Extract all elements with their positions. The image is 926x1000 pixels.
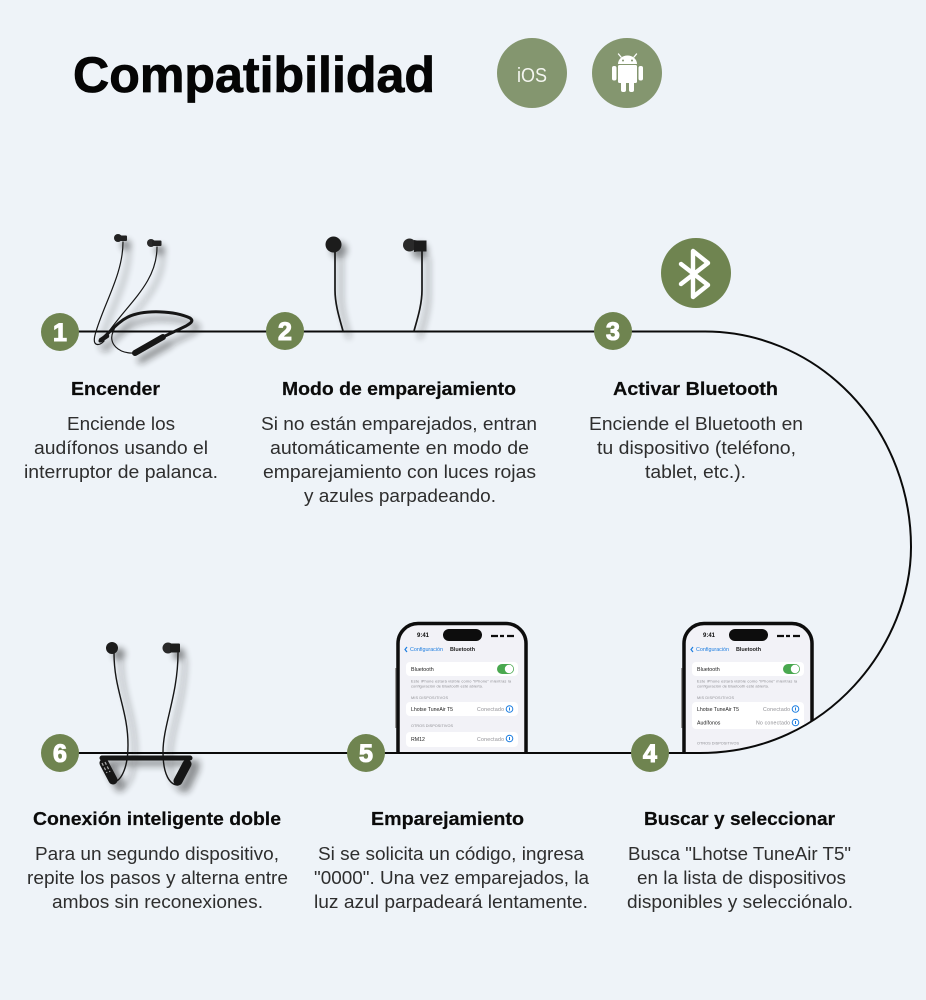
step 3 number badge: 3 [606, 318, 620, 346]
icon: Android badge [592, 38, 662, 108]
step 1 description [24, 413, 218, 482]
phone: step 4 Bluetooth screen: Bluetooth [697, 667, 720, 673]
step 2 description [261, 413, 537, 506]
icon: Bluetooth badge [661, 238, 731, 308]
step 5 description: "0000". Una vez emparejados, la [314, 867, 590, 888]
step 3 description: tu dispositivo (teléfono, [597, 437, 796, 458]
step 1 heading: Encender [71, 378, 160, 399]
step 3 number badge [594, 312, 632, 350]
phone: step 5 Bluetooth screen: configuración de Bluetooth esté abierta. [411, 684, 483, 688]
title: Compatibilidad [73, 47, 435, 103]
step 6 heading: Conexión inteligente doble [33, 808, 281, 829]
step 3 description: tablet, etc.). [645, 461, 746, 482]
phone: step 4 Bluetooth screen: MIS DISPOSITIVOS [697, 696, 734, 700]
phone: step 4 Bluetooth screen: Bluetooth [736, 647, 761, 653]
phone: step 4 Bluetooth screen: Este iPhone estará visible como "iPhone" mientras la [697, 678, 798, 684]
step 4 description: Busca "Lhotse TuneAir T5" [628, 843, 851, 864]
phone: step 5 Bluetooth screen: Configuración [410, 647, 443, 653]
step 6 number badge [41, 734, 79, 772]
step 3 description: Enciende el Bluetooth en [589, 413, 803, 434]
step 6 description [27, 843, 288, 912]
step 1 description: audífonos usando el [34, 437, 208, 458]
phone: step 5 Bluetooth screen: Bluetooth [411, 667, 434, 673]
phone: step 5 Bluetooth screen: Este iPhone estará visible como "iPhone" mientras la [411, 678, 512, 684]
phone: step 5 Bluetooth screen: MIS DISPOSITIVOS [411, 696, 448, 700]
phone: step 5 Bluetooth screen: Lhotse TuneAir T5 [411, 707, 453, 713]
step 4 description: disponibles y selecciónalo. [627, 891, 853, 912]
step 4 description [627, 843, 853, 912]
step 1 description: interruptor de palanca. [24, 461, 218, 482]
icon: earbuds step 2 [326, 236, 428, 337]
phone: step 5 Bluetooth screen: Conectado [477, 737, 504, 743]
phone: step 5 Bluetooth screen: Conectado [477, 707, 504, 713]
step 5 description: Si se solicita un código, ingresa [318, 843, 585, 864]
step 6 number badge: 6 [53, 740, 67, 768]
step 4 number badge: 4 [643, 740, 657, 768]
phone: step 5 Bluetooth screen: Bluetooth [450, 647, 475, 653]
phone: step 4 Bluetooth screen: configuración de Bluetooth esté abierta. [697, 684, 769, 688]
step 5 description: luz azul parpadeará lentamente. [314, 891, 588, 912]
phone: step 4 Bluetooth screen: Configuración [696, 647, 729, 653]
phone: step 4 Bluetooth screen: No conectado [756, 720, 790, 726]
step 5 heading: Emparejamiento [371, 808, 524, 829]
icon: neckband earphones step 6 [102, 642, 197, 791]
phone: step 4 Bluetooth screen: Audífonos [697, 720, 721, 726]
phone: step 4 Bluetooth screen: Lhotse TuneAir T5 [697, 707, 739, 713]
step 4 heading: Buscar y seleccionar [644, 808, 835, 829]
phone: step 5 Bluetooth screen: 9:41 [417, 633, 430, 639]
step 6 description: repite los pasos y alterna entre [27, 867, 288, 888]
step 1 number badge [41, 313, 79, 351]
step 1 description: Enciende los [67, 413, 175, 434]
phone: step 4 Bluetooth screen: 9:41 [703, 633, 716, 639]
step 6 description: Para un segundo dispositivo, [35, 843, 279, 864]
phone: step 4 Bluetooth screen: OTROS DISPOSITIVOS [697, 742, 739, 746]
step 2 description: y azules parpadeando. [304, 485, 496, 506]
step 4 description: en la lista de dispositivos [637, 867, 846, 888]
step 2 heading: Modo de emparejamiento [282, 378, 516, 399]
phone: step 5 Bluetooth screen [395, 622, 528, 752]
step 2 description: Si no están emparejados, entran [261, 413, 537, 434]
step 2 description: emparejamiento con luces rojas [263, 461, 536, 482]
icon: iOS badge: iOS [517, 65, 547, 87]
step 5 number badge [347, 734, 385, 772]
icon: neckband earphones step 1 [94, 234, 198, 360]
step 2 number badge [266, 312, 304, 350]
phone: step 5 Bluetooth screen: RM12 [411, 737, 425, 743]
step 1 number badge: 1 [53, 319, 67, 347]
icon: iOS badge [497, 38, 567, 108]
phone: step 4 Bluetooth screen: Conectado [763, 707, 790, 713]
step 4 number badge [631, 734, 669, 772]
connector line through all steps [60, 332, 911, 753]
step 2 number badge: 2 [278, 318, 292, 346]
step 3 description [589, 413, 803, 482]
phone: step 4 Bluetooth screen [681, 622, 814, 752]
step 5 description [314, 843, 590, 912]
step 3 heading: Activar Bluetooth [613, 378, 778, 399]
step 2 description: automáticamente en modo de [270, 437, 529, 458]
step 5 number badge: 5 [359, 740, 373, 768]
phone: step 5 Bluetooth screen: OTROS DISPOSITIVOS [411, 724, 453, 728]
step 6 description: ambos sin reconexiones. [52, 891, 263, 912]
